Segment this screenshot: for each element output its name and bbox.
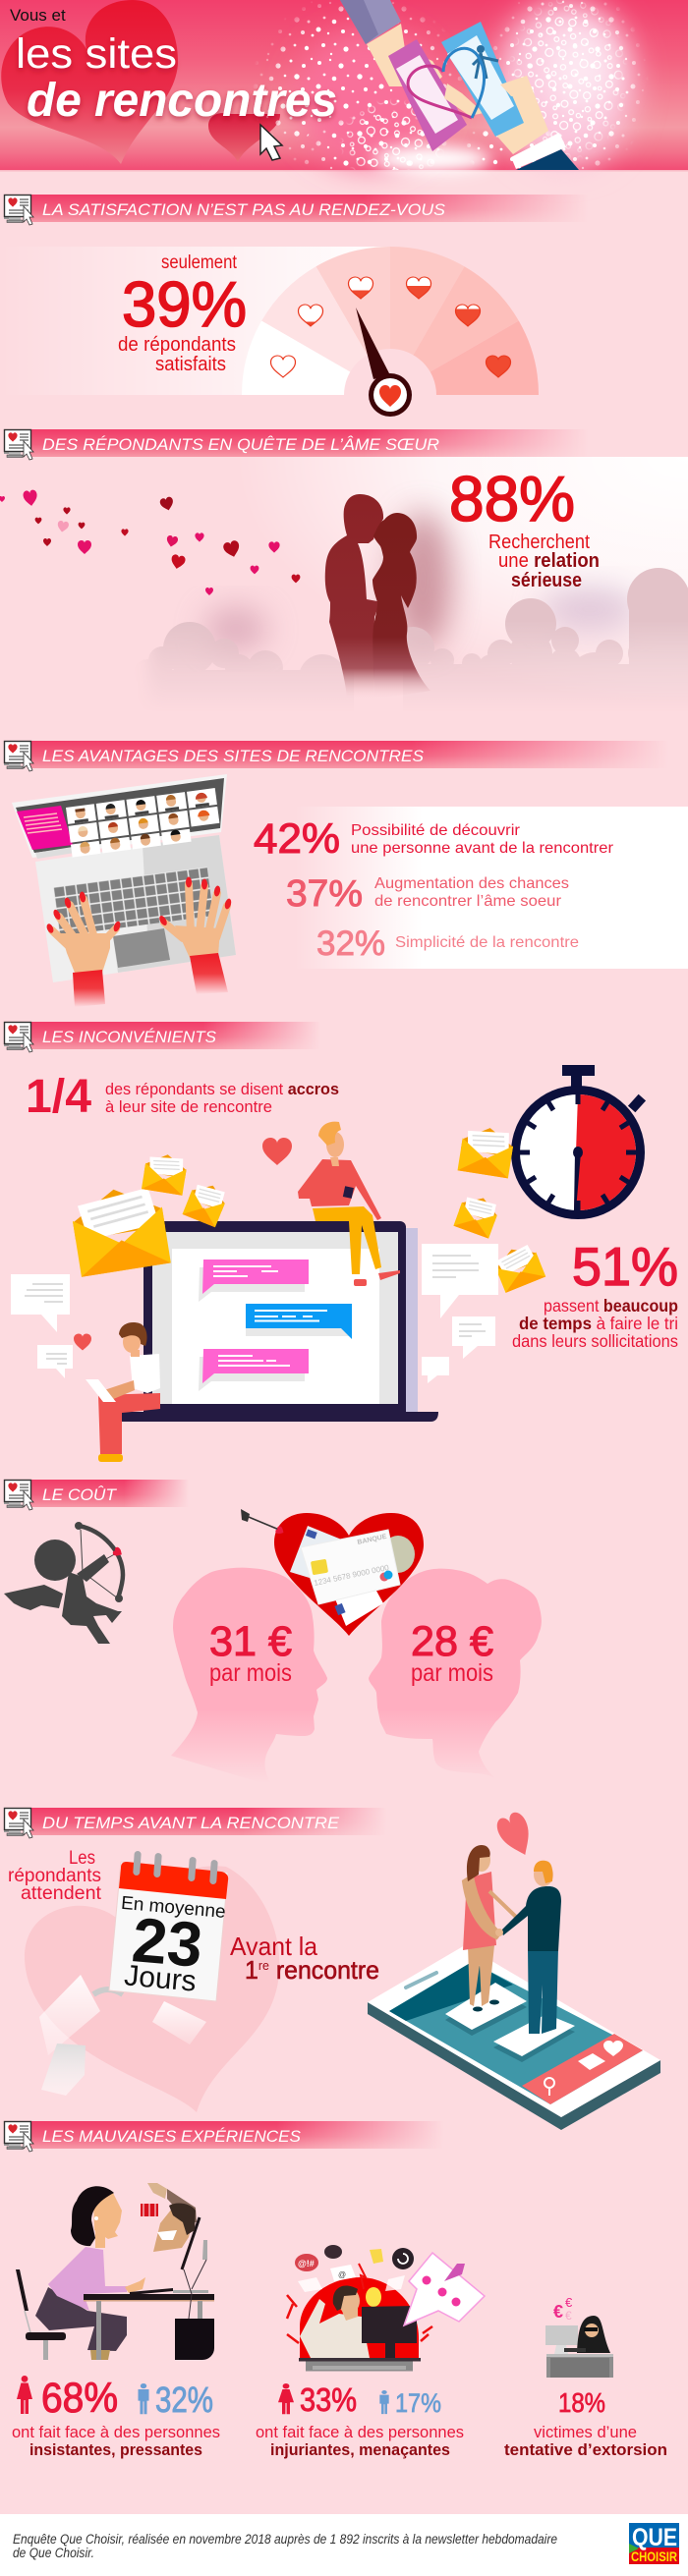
heart with bank card and notes: BANQUE bbox=[357, 1534, 387, 1546]
stat: 1/4: 1/4 bbox=[26, 1071, 91, 1123]
text: avant la 1re rencontre: 1 bbox=[245, 1955, 258, 1985]
heading: mauvaises expériences: LES MAUVAISES EXPÉRIENCES bbox=[42, 2127, 302, 2146]
stat: 31 € bbox=[209, 1618, 292, 1687]
text: répondants attendent: Les bbox=[69, 1848, 95, 1869]
stat: 28 € bbox=[411, 1618, 493, 1687]
profile tiles bbox=[66, 788, 221, 858]
small message icons bbox=[295, 2245, 414, 2292]
speech bubbles bbox=[11, 1244, 498, 1383]
stat: 28 €: par mois bbox=[411, 1659, 493, 1687]
big heart bbox=[1, 0, 178, 164]
stat: 33% / 17%: ont fait face à des personnes bbox=[256, 2424, 464, 2441]
laptop screen bbox=[121, 1221, 438, 1422]
stat: 18% bbox=[504, 2387, 667, 2459]
text: répondants attendent bbox=[8, 1848, 102, 1904]
woman bbox=[463, 1845, 518, 2012]
stat: 42%: une personne avant de la rencontrer bbox=[351, 840, 614, 857]
phones and hands bbox=[340, 0, 579, 170]
calendar bbox=[109, 1851, 228, 2001]
illustration: angry man at computer bbox=[287, 2245, 485, 2372]
title: les sites: les sites bbox=[16, 30, 177, 78]
heading: le coût: LE COÛT bbox=[42, 1485, 118, 1504]
stat: 31 €: par mois bbox=[209, 1659, 292, 1687]
logo: QUE bbox=[632, 2524, 677, 2551]
chat bubbles bbox=[199, 1260, 352, 1391]
title: de rencontres: de rencontres bbox=[27, 75, 337, 127]
text: avant la 1re rencontre: re bbox=[258, 1958, 269, 1973]
stat: 37%: Augmentation des chances bbox=[374, 875, 569, 892]
stat: 33% / 17% bbox=[256, 2381, 464, 2459]
stat: 39%: seulement bbox=[161, 252, 238, 273]
illustration: hacker: € bbox=[553, 2302, 563, 2322]
pale heart bbox=[25, 1866, 279, 2112]
stat: 32%: Simplicité de la rencontre bbox=[395, 934, 579, 951]
torn paper bbox=[39, 1975, 206, 2096]
panel: soulmate bbox=[0, 457, 688, 694]
stat: 68% / 32%: insistantes, pressantes bbox=[29, 2441, 202, 2459]
heading: satisfaction bbox=[4, 195, 588, 225]
stat: 51%: dans leurs sollicitations bbox=[512, 1331, 678, 1351]
stat: 31 €: 31 € bbox=[209, 1618, 292, 1665]
illustration: hacker: € bbox=[565, 2309, 572, 2323]
hands bbox=[52, 884, 227, 948]
stat: 28 €: 28 € bbox=[411, 1618, 493, 1665]
stat: 88%: une relation bbox=[498, 550, 600, 572]
white stats panel bbox=[295, 807, 688, 969]
stat: 37% bbox=[286, 873, 569, 915]
woman head silhouette bbox=[369, 1569, 542, 1778]
heading: âme soeur bbox=[4, 429, 588, 460]
small heart bbox=[74, 1334, 91, 1350]
panel: footer bbox=[0, 2514, 688, 2576]
heading: le coût bbox=[4, 1480, 189, 1510]
calendar: Jours bbox=[123, 1959, 198, 1998]
man sitting on laptop bbox=[298, 1122, 400, 1286]
stat: 42%: 42% bbox=[254, 815, 340, 863]
heart with bank card and notes: 1234 5678 9000 0000 bbox=[314, 1563, 390, 1588]
stat: 88%: sérieuse bbox=[511, 570, 582, 591]
stat: 33% / 17%: 17% bbox=[395, 2388, 441, 2418]
illustration: hacker: € bbox=[565, 2295, 573, 2310]
heading: avantages: LES AVANTAGES DES SITES DE RENCONTRES bbox=[42, 747, 425, 765]
heading: du temps: DU TEMPS AVANT LA RENCONTRE bbox=[42, 1814, 340, 1832]
heading: avantages bbox=[4, 741, 668, 771]
text: avant la 1re rencontre bbox=[230, 1932, 379, 1985]
logo: CHOISIR bbox=[631, 2548, 677, 2564]
panel: avantages bbox=[12, 774, 688, 1007]
stat: 88% bbox=[449, 463, 600, 591]
heading: mauvaises expériences bbox=[4, 2121, 443, 2152]
stat: 68% / 32% bbox=[12, 2375, 220, 2459]
source note: Enquête Que Choisir, réalisée en novembre 2018 auprès de 1 892 inscrits à la newsletter hebdomadaire bbox=[13, 2532, 557, 2547]
stat: 68% / 32%: 68% bbox=[41, 2375, 118, 2422]
panel: mauvaises expériences bbox=[12, 2183, 667, 2459]
flying hearts bbox=[0, 489, 300, 595]
envelopes bbox=[69, 1124, 545, 1293]
stat: 51%: 51% bbox=[572, 1236, 678, 1297]
illustration: woman and man in screen bbox=[16, 2183, 214, 2360]
panel: header banner bbox=[0, 0, 688, 173]
needle bbox=[356, 308, 390, 379]
panel: coût bbox=[4, 1509, 542, 1786]
heart bbox=[493, 1810, 539, 1861]
heading: du temps bbox=[4, 1808, 386, 1838]
woman with tablet bbox=[86, 1322, 160, 1462]
stat: 42%: Possibilité de découvrir bbox=[351, 822, 521, 839]
small message icons: @ bbox=[338, 2270, 346, 2279]
stat: 51%: passent beaucoup bbox=[544, 1296, 678, 1316]
stat: 1/4: des répondants se disent accros bbox=[105, 1081, 339, 1098]
text: avant la 1re rencontre: rencontre bbox=[269, 1955, 379, 1985]
text: vous et: Vous et bbox=[10, 6, 66, 25]
text: répondants attendent: attendent bbox=[21, 1883, 102, 1904]
speech bubble with dots bbox=[404, 2253, 485, 2325]
glow and white dots bbox=[226, 0, 659, 173]
small message icons: @!# bbox=[298, 2259, 315, 2268]
panel: satisfaction gauge bbox=[0, 247, 539, 417]
stat: 39% bbox=[118, 252, 247, 375]
stat: 18%: tentative d’extorsion bbox=[504, 2441, 667, 2459]
stat: 1/4: à leur site de rencontre bbox=[105, 1098, 272, 1116]
hearts scale bbox=[271, 277, 511, 377]
stat: 18%: 18% bbox=[558, 2387, 605, 2418]
stat: 37%: 37% bbox=[286, 873, 363, 915]
panel: inconvénients bbox=[11, 1065, 678, 1462]
calendar: 23 bbox=[130, 1904, 205, 1981]
heading: satisfaction: LA SATISFACTION N’EST PAS AU RENDEZ-VOUS bbox=[42, 200, 446, 219]
calendar: En moyenne bbox=[120, 1893, 226, 1923]
stat: 51%: de temps à faire le tri bbox=[519, 1314, 678, 1333]
heading: inconvénients: LES INCONVÉNIENTS bbox=[42, 1028, 217, 1046]
stat: 68% / 32%: 32% bbox=[155, 2380, 213, 2420]
heart with bank card and notes bbox=[274, 1513, 424, 1636]
stat: 33% / 17%: injuriantes, menaçantes bbox=[270, 2441, 450, 2459]
stat: 37%: de rencontrer l’âme soeur bbox=[374, 893, 562, 910]
stat: 68% / 32%: ont fait face à des personnes bbox=[12, 2424, 220, 2441]
stat: 33% / 17%: 33% bbox=[300, 2381, 357, 2418]
stat: 42% bbox=[254, 815, 614, 863]
stat: 1/4 bbox=[26, 1071, 339, 1123]
text: avant la 1re rencontre: Avant la bbox=[230, 1932, 318, 1961]
couple silhouette bbox=[325, 494, 430, 700]
clouds bbox=[149, 496, 688, 686]
phone bbox=[368, 1945, 660, 2130]
laptop with hands bbox=[12, 774, 236, 1007]
arrow bbox=[241, 1509, 285, 1536]
text: répondants attendent: répondants bbox=[8, 1866, 101, 1886]
stopwatch bbox=[511, 1065, 646, 1219]
small heart bbox=[208, 113, 280, 162]
icon: mouse cursor bbox=[260, 125, 282, 160]
stat: 18%: victimes d’une bbox=[534, 2424, 637, 2441]
stat: 32% bbox=[316, 924, 579, 963]
stat: 51% bbox=[512, 1236, 678, 1351]
stat: 88%: 88% bbox=[449, 463, 575, 534]
stat: 32%: 32% bbox=[316, 924, 385, 963]
man bbox=[495, 1861, 561, 2034]
stat: 39%: de répondants bbox=[118, 334, 236, 356]
illustration: hacker bbox=[545, 2295, 613, 2378]
stat: 88%: Recherchent bbox=[488, 532, 590, 553]
stat: 39%: satisfaits bbox=[155, 354, 226, 375]
icon: cupid bbox=[4, 1522, 124, 1644]
dial bbox=[369, 373, 412, 417]
source note: de Que Choisir. bbox=[13, 2546, 94, 2560]
stat: 39%: 39% bbox=[122, 268, 247, 340]
source note bbox=[13, 2532, 557, 2560]
panel: du temps bbox=[8, 1810, 660, 2130]
heading: âme soeur: DES RÉPONDANTS EN QUÊTE DE L’ÂME SŒUR bbox=[42, 435, 439, 454]
heading: inconvénients bbox=[4, 1022, 320, 1052]
logo bbox=[629, 2523, 679, 2564]
couple on phone bbox=[368, 1810, 660, 2130]
large heart bbox=[262, 1138, 292, 1165]
man head silhouette bbox=[171, 1568, 327, 1786]
